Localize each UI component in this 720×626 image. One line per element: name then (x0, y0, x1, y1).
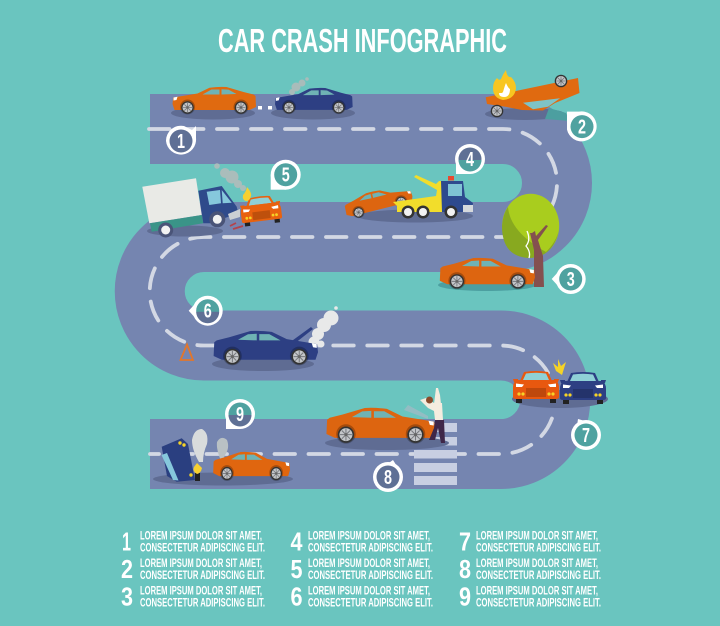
crosswalk (414, 423, 457, 485)
legend column 2: CONSECTETUR ADIPISCING ELIT. (308, 568, 433, 582)
legend column 2: 4 (290, 526, 303, 556)
legend column 3: CONSECTETUR ADIPISCING ELIT. (476, 540, 601, 554)
legend column 1: 2 (121, 554, 133, 584)
scene 3: car hits tree (438, 194, 559, 291)
legend column 2 (290, 526, 433, 612)
marker 1 (166, 126, 196, 155)
marker 3: 3 (567, 269, 575, 291)
scene 4: tow truck lifting car (343, 175, 473, 222)
legend column 1: 3 (121, 582, 133, 612)
legend column 1: CONSECTETUR ADIPISCING ELIT. (140, 568, 265, 582)
legend column 3: CONSECTETUR ADIPISCING ELIT. (476, 596, 601, 610)
marker 9 (225, 399, 255, 429)
winding road (149, 129, 557, 454)
legend column 3 (459, 526, 601, 612)
marker 2 (567, 111, 597, 141)
legend column 1: LOREM IPSUM DOLOR SIT AMET, (140, 528, 262, 542)
scene 1: rear-end tow between two cars (171, 77, 355, 120)
legend column 1: LOREM IPSUM DOLOR SIT AMET, (140, 556, 262, 570)
marker 2: 2 (578, 117, 586, 139)
legend column 1: LOREM IPSUM DOLOR SIT AMET, (140, 584, 262, 598)
marker 7: 7 (582, 425, 590, 447)
marker 9: 9 (236, 404, 244, 426)
marker 5: 5 (282, 165, 290, 187)
legend column 3: LOREM IPSUM DOLOR SIT AMET, (476, 556, 598, 570)
marker 6: 6 (204, 301, 212, 323)
legend column 2: LOREM IPSUM DOLOR SIT AMET, (308, 556, 430, 570)
scene 7: head-on collision (512, 359, 608, 408)
legend column 3: 9 (459, 582, 471, 612)
legend column 2: 6 (290, 582, 302, 612)
legend column 2: CONSECTETUR ADIPISCING ELIT. (308, 540, 433, 554)
legend column 2: 5 (290, 554, 302, 584)
legend column 1 (121, 526, 265, 612)
title: CAR CRASH INFOGRAPHIC (218, 22, 507, 59)
legend column 3: 7 (459, 526, 471, 556)
scene 6: broken-down car with warning triangle (180, 306, 338, 371)
legend column 3: 8 (459, 554, 471, 584)
marker 6 (189, 296, 223, 326)
legend column 2: CONSECTETUR ADIPISCING ELIT. (308, 596, 433, 610)
legend column 2: LOREM IPSUM DOLOR SIT AMET, (308, 528, 430, 542)
legend column 2: LOREM IPSUM DOLOR SIT AMET, (308, 584, 430, 598)
marker 3 (552, 264, 586, 294)
scene 5: truck hits car (142, 163, 283, 238)
legend column 3: LOREM IPSUM DOLOR SIT AMET, (476, 528, 598, 542)
legend column 1: 1 (122, 526, 131, 556)
scene 8: car and pedestrian on crossing (325, 388, 449, 450)
marker 7 (571, 419, 601, 450)
legend column 3: CONSECTETUR ADIPISCING ELIT. (476, 568, 601, 582)
marker 1: 1 (177, 131, 185, 153)
legend column 1: CONSECTETUR ADIPISCING ELIT. (140, 596, 265, 610)
marker 4: 4 (466, 149, 475, 171)
legend column 3: LOREM IPSUM DOLOR SIT AMET, (476, 584, 598, 598)
marker 8: 8 (384, 467, 392, 489)
marker 4 (455, 144, 485, 174)
scene 9: overturned car and burning car (153, 429, 293, 486)
legend column 1: CONSECTETUR ADIPISCING ELIT. (140, 540, 265, 554)
marker 8 (373, 460, 403, 492)
marker 5 (271, 160, 301, 190)
scene 2: overturned burning car (485, 70, 580, 121)
